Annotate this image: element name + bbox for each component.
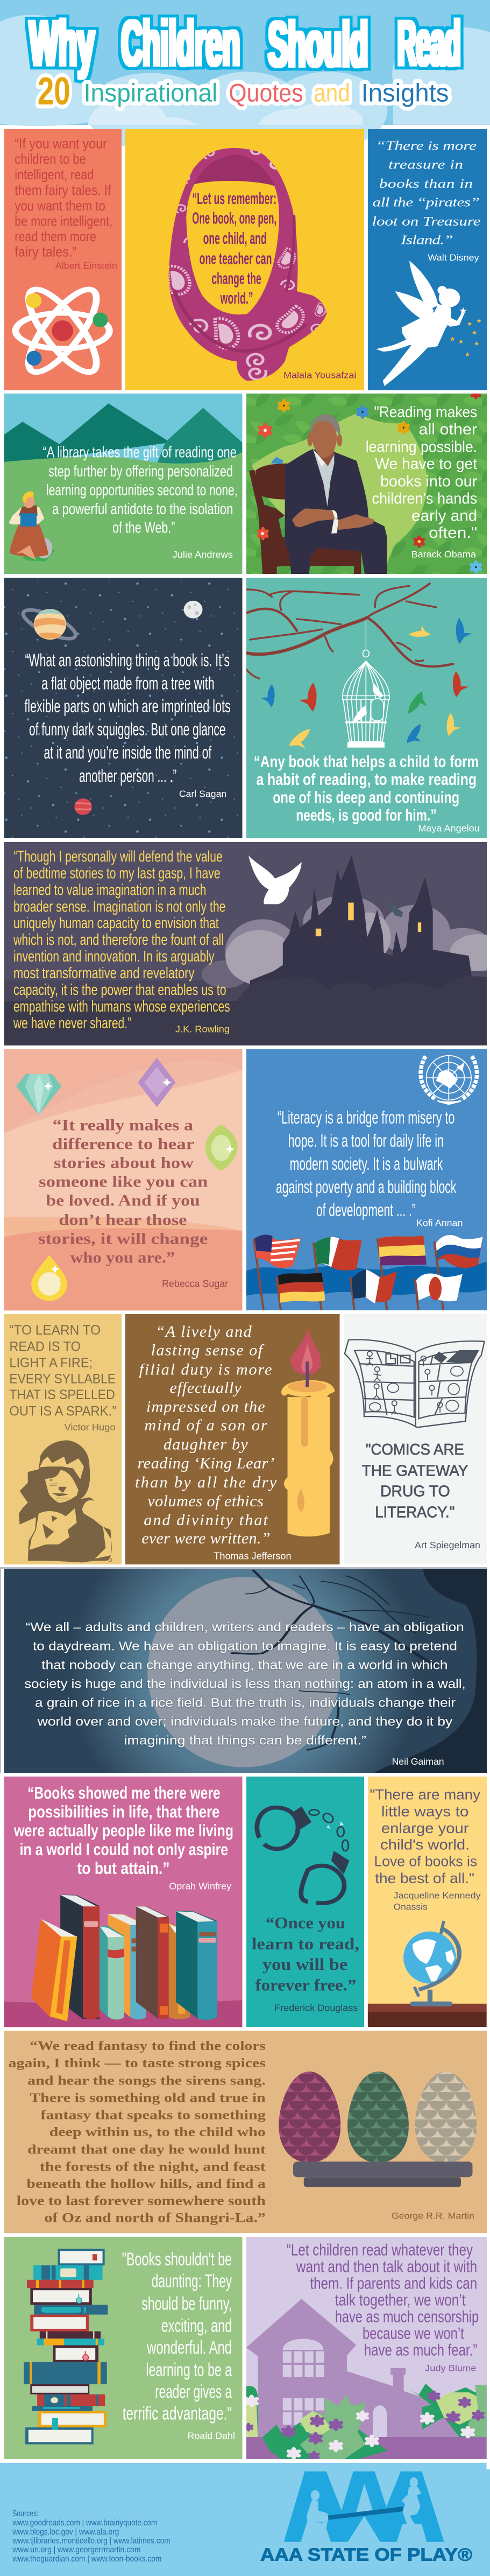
illustration: tree (232, 1569, 487, 1773)
illustration: space (4, 578, 242, 841)
quote text (287, 2241, 479, 2359)
panel: Neil Gaiman (0, 1567, 487, 1779)
quote text: world over and over; individuals make the future, and they do it by (37, 1714, 453, 1728)
attribution: J.K. Rowling (175, 1024, 230, 1035)
attribution: Oprah Winfrey (169, 1881, 232, 1891)
quote text: of funny dark squiggles. But one glance (29, 720, 225, 740)
panel: Art Spiegelman (344, 1314, 487, 1564)
quote text: "There are many (370, 1787, 481, 1803)
quote text: OUT IS A SPARK.” (9, 1404, 116, 1419)
quote text (370, 1787, 481, 1886)
quote text: effectually (169, 1379, 242, 1397)
quote text: “There is more (376, 139, 477, 153)
illustration: moon (4, 1569, 487, 1779)
quote text: we have never shared.” (13, 1015, 131, 1032)
subtitle: Quotes (229, 79, 303, 107)
quote text: THAT IS SPELLED (9, 1387, 115, 1402)
sources: www.blogs.loc.gov | www.ala.org (12, 2527, 119, 2536)
attribution: Barack Obama (411, 549, 477, 560)
attribution: George R.R. Martin (392, 2211, 474, 2221)
icon: green gem (205, 1124, 238, 1171)
quote text: in a world I could not only aspire (20, 1840, 228, 1859)
attribution: Carl Sagan (179, 789, 226, 799)
illustration: mountains (4, 403, 242, 574)
panel: Jacqueline Kennedy Onassis (368, 1777, 487, 2027)
quote text: learned to value imagination in a much (13, 881, 206, 899)
quote text: a grain of rice in a rice field. But the truth is, individuals change their (35, 1695, 456, 1709)
attribution: Judy Blume (425, 2363, 476, 2374)
icon: broken handcuffs (257, 1807, 350, 1903)
icon: girl reading (9, 492, 55, 561)
panel: Victor Hugo (4, 1314, 122, 1564)
quote text: child's world. (380, 1837, 470, 1853)
attribution: Walt Disney (428, 252, 479, 263)
quote text: fairy tales.” (15, 244, 76, 260)
quote text: which is not, and therefore the fount of all (13, 931, 224, 949)
quote text: dreamt that one day he would hunt (27, 2142, 266, 2157)
panel: Albert Einstein (4, 129, 122, 390)
quote text: broader sense. Imagination is not only the (13, 898, 225, 915)
quote text: "Reading makes (374, 404, 477, 421)
quote text: the best of all." (375, 1871, 474, 1886)
icon: purple gem (138, 1058, 176, 1107)
icon: UN emblem (421, 1056, 477, 1104)
attribution: Frederick Douglass (274, 2003, 358, 2013)
page header (0, 0, 490, 150)
quote text: don’t hear those (59, 1211, 187, 1229)
quote text: be loved. And if you (46, 1192, 200, 1210)
panel: Malala Yousafzai (125, 129, 364, 390)
quote text (13, 848, 230, 1032)
quote text: children's hands (372, 490, 477, 507)
attribution: Malala Yousafzai (283, 370, 356, 380)
panel: J.K. Rowling (4, 842, 490, 1045)
quote text: of development ... .” (316, 1201, 416, 1220)
quote text: volumes of ethics (147, 1492, 264, 1510)
quote text: at it and you’re inside the mind of (44, 743, 212, 763)
attribution: Julie Andrews (173, 550, 233, 560)
illustration: Cosette (19, 1440, 112, 1562)
illustration: birds (259, 616, 474, 753)
quote text: you will be (262, 1956, 347, 1974)
illustration: house and garden (243, 2299, 487, 2461)
illustration: bird cage (343, 621, 389, 747)
quote text: forever free.” (255, 1976, 356, 1995)
quote text: imagining that things can be different.” (124, 1733, 366, 1747)
quote text: LIGHT A FIRE; (9, 1356, 93, 1370)
quote text: treasure in (388, 158, 463, 172)
quote text: a powerful antidote to the isolation (52, 501, 233, 518)
quote text: capacity, it is the power that enables us to (13, 981, 226, 999)
quote text: daunting: They (152, 2271, 232, 2292)
quote text (15, 136, 112, 260)
subtitle: and (314, 79, 350, 107)
quote text: the forests of the night, and feast (40, 2159, 266, 2174)
quote text: to daydream. We have an obligation to imagine. It is easy to pretend (33, 1639, 457, 1653)
quote text: all the “pirates” (373, 195, 480, 210)
quote text: READ IS TO (9, 1339, 81, 1354)
icon: teal diamond (16, 1074, 61, 1115)
quote text: THE GATEWAY (362, 1463, 468, 1479)
quote text: that nobody can change anything, that we are in a world in which (41, 1658, 448, 1672)
attribution: Maya Angelou (418, 823, 480, 834)
quote text: fantasy that speaks to something (41, 2108, 266, 2122)
quote text (13, 1784, 233, 1878)
quote text: loot on Treasure (372, 214, 481, 229)
quote text: world.” (220, 290, 253, 307)
illustration: tree branch (246, 584, 453, 679)
quote text: “It really makes a (53, 1117, 193, 1134)
quote text: empathise with humans whose experiences (13, 998, 230, 1015)
quote text (276, 1108, 456, 1220)
quote text: There is something old and true in (30, 2090, 266, 2105)
quote text: should be funny, (141, 2293, 232, 2314)
panel: Rebecca Sugar (4, 1049, 242, 1310)
panel: Judy Blume (243, 2237, 487, 2461)
quote text: exciting, and (161, 2315, 232, 2336)
quote text: intelligent, read (15, 167, 94, 183)
quote text (254, 752, 479, 824)
panel: Roald Dahl (4, 2237, 242, 2459)
quote text: “A lively and (155, 1323, 252, 1340)
quote text (135, 1323, 277, 1547)
attribution: Albert Einstein (55, 261, 117, 271)
quote text: “Once you (266, 1914, 345, 1933)
quote text: society is huge and the individual is less than nothing: an atom in a wall, (24, 1676, 466, 1690)
quote text: than by all the dry (135, 1473, 277, 1491)
quote text (24, 1620, 466, 1747)
panel: Malala Yousafzai: one teacher can (200, 250, 272, 268)
quote text (252, 1914, 359, 1995)
quote text: early and (411, 507, 477, 524)
panel: Maya Angelou (246, 578, 487, 838)
attribution: Rebecca Sugar (162, 1278, 228, 1289)
logo: AAA State of Play: AAA STATE OF PLAY® (260, 2545, 472, 2565)
footer (0, 2463, 490, 2576)
quote text: “We read fantasy to find the colors (30, 2039, 266, 2053)
panel: Malala Yousafzai: “Let us remember: (192, 190, 276, 208)
sources: www.tjlibraries.monticello.org | www.latimes.com (12, 2536, 171, 2545)
panel: Julie Andrews (4, 394, 242, 574)
quote text: a flat object made from a tree with (41, 673, 215, 693)
sources (12, 2509, 171, 2564)
panel: Carl Sagan (4, 578, 242, 841)
quote text: change the (211, 270, 261, 288)
quote text (192, 190, 276, 307)
icon: candle (281, 1328, 335, 1536)
quote text (372, 139, 481, 248)
quote text: mind of a son or (144, 1416, 267, 1434)
quote text: “If you want your (15, 136, 107, 152)
icon: atom (16, 283, 109, 379)
quote text: ever were written.” (141, 1529, 271, 1547)
title: Why (30, 8, 94, 79)
illustration: portrait (249, 388, 483, 574)
quote text (362, 1441, 468, 1521)
clouds (0, 15, 490, 150)
quote text: books into our (380, 473, 477, 490)
subtitle (38, 69, 449, 113)
quote text: daughter by (164, 1436, 248, 1454)
quote text: of bedtime stories to my last gasp, I have (13, 865, 221, 882)
quote text: “Though I personally will defend the value (13, 848, 223, 865)
quote text: possibilities in life, that there (28, 1802, 219, 1821)
quote text: lasting sense of (151, 1342, 265, 1359)
quote text: “Books showed me there were (27, 1784, 221, 1803)
quote text: learning opportunities second to none, (46, 482, 238, 499)
subtitle: Insights (361, 79, 449, 107)
quote text: again, I think — to taste strong spices (9, 2056, 266, 2070)
quote text: another person ... .” (79, 766, 176, 786)
quote text: reading ‘King Lear’ (138, 1455, 274, 1472)
quote text: invention and innovation. In its arguably (13, 948, 215, 965)
quote text: enlarge your (381, 1821, 468, 1837)
quote text: “What an astonishing thing a book is. It’s (25, 650, 230, 670)
attribution: Victor Hugo (65, 1422, 115, 1433)
panel: Walt Disney (368, 129, 487, 390)
quote text (9, 1323, 116, 1419)
quote text (43, 444, 238, 536)
quote text: you want them to (15, 198, 105, 214)
quote text: of Oz and north of Shangri-La.” (45, 2210, 266, 2226)
quote text: who you are.” (70, 1248, 175, 1266)
illustration: flags (246, 1234, 487, 1314)
quote text: difference to hear (52, 1135, 194, 1153)
quote text: uniquely human capacity to envision that (13, 915, 219, 932)
quote text: read them more (15, 229, 96, 244)
icon: yellow gem (31, 1255, 67, 1301)
quote text: one child, and (203, 230, 267, 248)
quote text: “A library takes the gift of reading one (43, 444, 237, 461)
panel: Oprah Winfrey (4, 1777, 242, 2027)
quote text: books than in (379, 177, 473, 191)
quote text: filial duty is more (139, 1360, 272, 1378)
title: Children (121, 8, 240, 79)
quote text: terrific advantage." (123, 2404, 232, 2424)
quote text: wonderful. And (146, 2338, 232, 2358)
icon: fairy (376, 261, 481, 386)
quote text: children to be (15, 151, 86, 167)
quote text: beneath the hollow hills, and find a (26, 2177, 266, 2191)
quote text (38, 1117, 208, 1266)
attribution: Thomas Jefferson (214, 1550, 291, 1561)
sources: www.theguardian.com | www.toon-books.com (12, 2554, 161, 2564)
quote text: reader gives a (155, 2382, 232, 2402)
quote text: of the Web.” (112, 519, 175, 536)
icon: hijab (160, 142, 326, 381)
quote text: "Books shouldn't be (122, 2249, 232, 2270)
quote text: were actually people like me living (13, 1821, 233, 1841)
quote text: love to last forever somewhere south (17, 2194, 266, 2208)
sources: www.un.org | www.georgerrmartin.com (12, 2545, 140, 2554)
panel: George R.R. Martin (4, 2031, 487, 2233)
quote text: most transformative and revelatory (13, 965, 195, 982)
quote text: learning possible. (366, 438, 477, 455)
background waves (4, 1061, 242, 1310)
panel: Thomas Jefferson (125, 1314, 340, 1564)
quote text: impressed on the (146, 1398, 265, 1416)
panel: Malala Yousafzai: One book, one pen, (192, 209, 276, 228)
quote text: be more intelligent, (15, 214, 112, 229)
attribution: Kofi Annan (416, 1218, 463, 1229)
quote text: DRUG TO (380, 1483, 450, 1500)
quote text: Island.” (400, 233, 453, 248)
attribution: Roald Dahl (188, 2431, 235, 2441)
attribution: Neil Gaiman (392, 1756, 444, 1767)
quote text: We have to get (375, 455, 477, 473)
quote text: “TO LEARN TO (9, 1323, 101, 1338)
panel: Barack Obama (246, 388, 487, 574)
quote text: EVERY SYLLABLE (9, 1371, 116, 1386)
logo: AAA State of Play (260, 2472, 472, 2565)
quote text: them fairy tales. If (15, 183, 111, 198)
quote text: "COMICS ARE (366, 1441, 464, 1458)
quote text: to but attain.” (77, 1859, 169, 1878)
quote text: someone like you can (39, 1173, 208, 1191)
quote text (24, 650, 231, 786)
quote text: Love of books is (374, 1854, 477, 1870)
quote text: “We all – adults and children, writers and readers – have an obligation (26, 1620, 464, 1634)
sources: www.goodreads.com | www.brainyquote.com (12, 2518, 157, 2528)
quote text: stories, it will change (38, 1230, 208, 1247)
attribution: Onassis (393, 1901, 428, 1912)
attribution (393, 1890, 481, 1912)
illustration: castle (4, 855, 490, 1045)
subtitle: Inspirational (84, 79, 217, 107)
illustration: books (4, 1895, 242, 2027)
illustration: stack of books (24, 2249, 108, 2444)
sources: Sources: (12, 2509, 38, 2518)
icon: comic book (345, 1339, 485, 1427)
quote text: learn to read, (252, 1935, 359, 1953)
attribution: Art Spiegelman (415, 1540, 480, 1550)
quote text (122, 2249, 232, 2424)
panel: Frederick Douglass (246, 1777, 364, 2027)
icon: dragon eggs (279, 2072, 477, 2187)
quote text: LITERACY." (375, 1504, 455, 1521)
quote text: all other (419, 421, 477, 438)
attribution: Jacqueline Kennedy (393, 1890, 481, 1900)
quote text: little ways to (381, 1804, 468, 1820)
quote text: step further by offering personalized (48, 463, 233, 480)
quote text: learning to be a (146, 2360, 232, 2380)
quote text (366, 404, 477, 542)
quote text: and divinity that (144, 1511, 268, 1529)
quote text: often." (429, 524, 477, 542)
quote text: stories about how (54, 1154, 194, 1172)
icon: owl (248, 855, 302, 904)
subtitle: 20 (38, 69, 70, 113)
icon: globe on desk (368, 1921, 487, 2027)
quote text: deep within us, to the child who (49, 2125, 266, 2139)
quote text: and hear the songs the sirens sang. (27, 2073, 266, 2088)
panel: Kofi Annan (246, 1049, 487, 1314)
quote text: flexible parts on which are imprinted lots (24, 697, 231, 717)
quote text (9, 2039, 266, 2226)
